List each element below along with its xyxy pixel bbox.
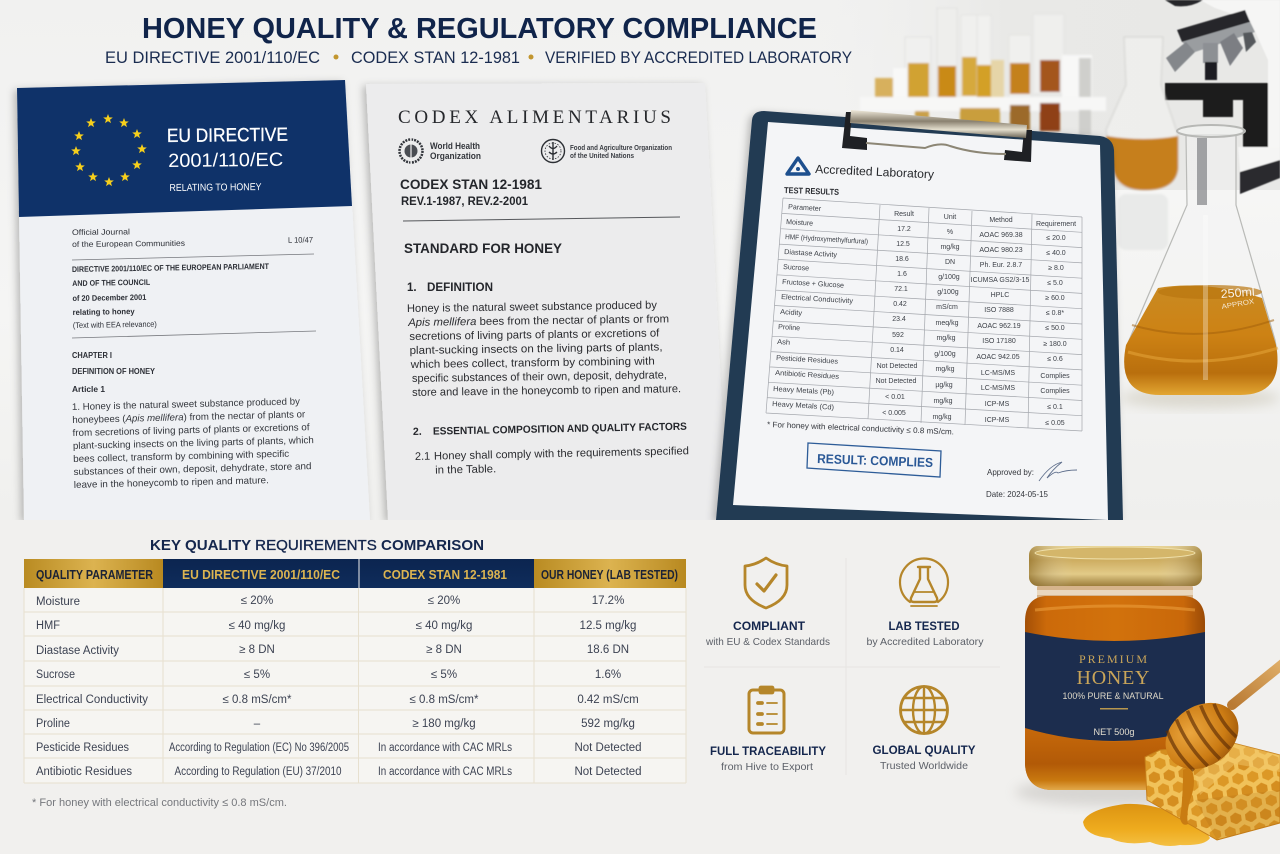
FAO name: [570, 145, 672, 160]
badge: lab tested: LAB TESTED: [888, 619, 960, 633]
definition paragraph: Apis mellifera bees from the nectar of plants or from: [407, 313, 669, 329]
table rows: According to Regulation (EC) No 396/2005: [169, 742, 349, 754]
table rows: ≤ 0.8 mS/cm*: [410, 694, 479, 706]
front flask with amber liquid: [1124, 125, 1278, 395]
test results table: Complies: [1040, 373, 1070, 380]
test results table: g/100g: [934, 351, 956, 358]
badge: compliant: [705, 558, 830, 648]
subtitle: [105, 48, 852, 67]
test results table: µg/kg: [935, 382, 953, 389]
composition text: 2.1: [415, 451, 430, 463]
front flask shadow: [1120, 388, 1280, 408]
FAO name: of the United Nations: [570, 153, 634, 160]
honey puddle: [1083, 804, 1210, 846]
definition paragraph: secretions of living parts of plants or excretions of: [409, 327, 660, 343]
approval block: Approved by:: [987, 467, 1034, 477]
test results table: %: [947, 229, 953, 236]
report sheet: [733, 122, 1108, 520]
test results table: ≤ 50.0: [1045, 325, 1065, 332]
test results table: mg/kg: [935, 366, 955, 373]
composition heading: 2.: [413, 426, 422, 438]
definition paragraph: which bees collect, transform by combining with: [410, 356, 655, 371]
journal header: [72, 225, 314, 249]
jar glass neck: [1037, 584, 1193, 602]
definition paragraph: store and leave in the honeycomb to ripen and mature.: [412, 383, 681, 399]
table rows: Antibiotic Residues: [36, 766, 132, 778]
title: HONEY QUALITY & REGULATORY COMPLIANCE: [142, 13, 817, 45]
WHO name: [430, 141, 481, 162]
definition paragraph: plant-sucking insects on the living parts of plants,: [409, 341, 663, 357]
test results table: Acidity: [780, 307, 803, 317]
test results table: ≤ 0.05: [1045, 420, 1065, 427]
table rows: Pesticide Residues: [36, 742, 129, 754]
chapter headings: DEFINITION OF HONEY: [72, 367, 156, 376]
blue cover band: [17, 80, 352, 217]
table rows: Sucrose: [36, 669, 75, 681]
test results table: Complies: [1040, 388, 1070, 395]
badge: compliant: with EU & Codex Standards: [705, 637, 830, 648]
table rows: ≤ 40 mg/kg: [229, 620, 285, 632]
test results table: AOAC 969.38: [979, 232, 1023, 239]
table header: [24, 559, 686, 588]
approval block: Date: 2024-05-15: [986, 489, 1048, 499]
chapter headings: Article 1: [72, 385, 106, 394]
standard heading: STANDARD FOR HONEY: [404, 240, 563, 256]
test results table: mS/cm: [936, 304, 958, 311]
jar lid: [1029, 546, 1202, 586]
definition heading: 1.: [407, 282, 417, 294]
standard reference: CODEX STAN 12-1981: [400, 176, 542, 192]
definition paragraph: [72, 396, 315, 491]
badge: global quality: [872, 686, 976, 772]
test results table: 0.42: [893, 301, 907, 308]
test results table: Requirement: [1036, 221, 1076, 228]
standard reference: REV.1-1987, REV.2-2001: [401, 194, 528, 208]
lab name: Accredited Laboratory: [815, 162, 934, 181]
test results table: 592: [892, 332, 904, 339]
definition paragraph: substances of their own, deposit, dehydrate, store and: [73, 461, 312, 478]
table rows: Proline: [36, 718, 70, 730]
table rows: [36, 595, 642, 778]
test results table: Ph. Eur. 2.8.7: [980, 262, 1022, 269]
test results table: 12.5: [896, 241, 910, 248]
table rows: ≤ 5%: [431, 669, 457, 681]
jar label text: [1062, 652, 1164, 738]
jar honey body: [1025, 596, 1205, 790]
directive title: DIRECTIVE 2001/110/EC OF THE EUROPEAN PARLIAMENT: [72, 262, 269, 274]
lab scene: test tubes in rack: [860, 8, 1106, 135]
journal header: of the European Communities: [72, 239, 185, 249]
test results table: AOAC 980.23: [979, 247, 1023, 254]
test results table: 1.6: [897, 271, 907, 278]
test results table: mg/kg: [933, 398, 953, 405]
jar label text: PREMIUM: [1079, 652, 1147, 666]
report footnote: * For honey with electrical conductivity ≤ 0.8 mS/cm.: [767, 420, 954, 437]
table rows: Diastase Activity: [36, 645, 119, 657]
FAO name: Food and Agriculture Organization: [570, 145, 672, 152]
table footnote: * For honey with electrical conductivity ≤ 0.8 mS/cm.: [32, 797, 287, 809]
table header: CODEX STAN 12-1981: [383, 568, 507, 582]
icon: lab logo: [787, 158, 809, 174]
definition paragraph: from secretions of living parts of plants or excretions of: [72, 422, 310, 439]
table rows: ≤ 0.8 mS/cm*: [223, 694, 292, 706]
subtitle: VERIFIED BY ACCREDITED LABORATORY: [545, 48, 852, 67]
composition text: [415, 445, 689, 477]
test results heading: TEST RESULTS: [784, 185, 840, 197]
directive title: of 20 December 2001: [72, 293, 147, 303]
test results table: Parameter: [788, 202, 822, 213]
test results table: ≥ 60.0: [1045, 295, 1065, 302]
badge: compliant: COMPLIANT: [733, 619, 806, 633]
icon: globe: [900, 686, 948, 734]
chapter headings: CHAPTER I: [72, 351, 112, 360]
approval block: [986, 462, 1077, 499]
icon: FAO emblem: [542, 140, 564, 162]
table rows: 17.2%: [592, 595, 624, 607]
test results table: ≤ 40.0: [1046, 250, 1066, 257]
table rows: Not Detected: [574, 766, 642, 778]
table rows: Not Detected: [574, 742, 642, 754]
table rows: ≥ 8 DN: [239, 644, 275, 656]
result stamp: RESULT: COMPLIES: [817, 451, 934, 470]
cover heading: EU DIRECTIVE: [167, 125, 288, 147]
test results table: Heavy Metals (Pb): [773, 384, 834, 397]
test results table: ISO 17180: [982, 338, 1016, 345]
badge: global quality: GLOBAL QUALITY: [872, 743, 976, 757]
test results table: mg/kg: [932, 414, 952, 421]
honey dipper: [1153, 662, 1280, 825]
test results table: 18.6: [895, 256, 909, 263]
composition text: Honey shall comply with the requirements specified: [434, 445, 689, 463]
test results table: < 0.005: [882, 410, 906, 417]
table rows: 592 mg/kg: [581, 718, 635, 730]
lab scene: microscope: [1165, 0, 1280, 194]
test results table: Ash: [777, 337, 790, 347]
jar shadow: [1015, 778, 1205, 806]
test results table: g/100g: [937, 289, 959, 296]
journal header: Official Journal: [72, 227, 130, 237]
panel: Codex document: [366, 83, 728, 520]
comparison table: [24, 559, 686, 783]
test results table: mg/kg: [936, 335, 956, 342]
test results table: Unit: [944, 214, 956, 221]
test results table: ≥ 180.0: [1043, 341, 1067, 348]
badge: full traceability: FULL TRACEABILITY: [710, 744, 826, 758]
test results table: Not Detected: [877, 363, 918, 370]
test results table: g/100g: [938, 274, 960, 281]
standard reference: [400, 176, 542, 208]
cover heading: RELATING TO HONEY: [169, 182, 262, 194]
test results table: Proline: [778, 322, 800, 332]
table rows: Moisture: [36, 596, 80, 608]
test results table: AOAC 962.19: [977, 323, 1021, 330]
definition paragraph: [407, 299, 681, 399]
test results table: mg/kg: [940, 244, 960, 251]
table rows: –: [254, 718, 261, 730]
test results table: ≤ 20.0: [1046, 235, 1066, 242]
test results table: 0.14: [890, 347, 904, 354]
table rows: ≤ 5%: [244, 669, 270, 681]
definition paragraph: honeybees (Apis mellifera) from the nectar of plants or: [72, 409, 306, 426]
test results table: ICP-MS: [985, 417, 1010, 424]
test results table: ≤ 0.1: [1047, 404, 1063, 411]
definition paragraph: bees collect, transform by combining with specific: [73, 449, 289, 465]
directive title: relating to honey: [73, 307, 135, 317]
jar label: [1025, 632, 1205, 741]
test results table: Diastase Activity: [784, 247, 838, 259]
front flask with amber liquid: 250ml: [1220, 285, 1255, 301]
test results table: LC-MS/MS: [981, 385, 1015, 392]
table rows: HMF: [36, 620, 60, 632]
test results table: 72.1: [894, 286, 908, 293]
table rows: In accordance with CAC MRLs: [378, 742, 512, 754]
subtitle: CODEX STAN 12-1981: [351, 48, 520, 67]
test results table: ≥ 8.0: [1048, 265, 1064, 272]
front flask with amber liquid: APPROX: [1221, 298, 1255, 311]
honeycomb: [1145, 743, 1280, 840]
test results table: ICP-MS: [985, 401, 1010, 408]
comparison section title: KEY QUALITY REQUIREMENTS COMPARISON: [150, 537, 484, 554]
table rows: 12.5 mg/kg: [580, 620, 636, 632]
jar label text: HONEY: [1076, 667, 1150, 689]
test results table: < 0.01: [885, 394, 905, 401]
definition paragraph: 1. Honey is the natural sweet substance produced by: [72, 396, 300, 413]
badge: full traceability: from Hive to Export: [721, 762, 813, 773]
WHO name: World Health: [430, 141, 480, 152]
table header: OUR HONEY (LAB TESTED): [541, 568, 678, 582]
badge: lab tested: by Accredited Laboratory: [866, 637, 984, 648]
icon: WHO emblem: [400, 138, 422, 164]
test results table: Fructose + Glucose: [782, 277, 844, 290]
test results table: HPLC: [991, 292, 1009, 299]
badge: global quality: Trusted Worldwide: [880, 761, 968, 772]
journal header: L 10/47: [288, 235, 314, 245]
test results table: Not Detected: [876, 378, 917, 385]
test results table: Moisture: [786, 217, 813, 228]
directive title: AND OF THE COUNCIL: [72, 278, 150, 288]
test results table: Antibiotic Residues: [775, 368, 840, 381]
table rows: ≥ 180 mg/kg: [412, 718, 476, 730]
table rows: ≤ 40 mg/kg: [416, 620, 472, 632]
test results table: Pesticide Residues: [776, 353, 839, 366]
test results table: ≤ 5.0: [1047, 280, 1063, 287]
table rows: In accordance with CAC MRLs: [378, 766, 512, 778]
codex heading: CODEX ALIMENTARIUS: [398, 107, 671, 128]
lab scene: rear flask: [1106, 37, 1178, 250]
table rows: According to Regulation (EU) 37/2010: [174, 766, 342, 778]
test results table: AOAC 942.05: [976, 354, 1020, 361]
icon: flask in circle: [900, 559, 948, 606]
composition heading: ESSENTIAL COMPOSITION AND QUALITY FACTORS: [433, 421, 687, 438]
icon: clipboard clip: [842, 110, 1032, 162]
test results table: 17.2: [897, 226, 911, 233]
directive title: (Text with EEA relevance): [73, 320, 157, 330]
icon: shield: [745, 558, 787, 608]
definition heading: DEFINITION: [427, 282, 493, 294]
table rows: 1.6%: [595, 669, 621, 681]
test results table: Heavy Metals (Cd): [772, 399, 834, 412]
chapter headings: [72, 351, 156, 394]
result stamp: [807, 443, 941, 477]
badge: full traceability: [710, 687, 826, 773]
panel: lower section: [0, 520, 1280, 854]
test results table: Result: [894, 211, 914, 218]
honey jar: [1025, 546, 1205, 790]
badge: lab tested: [866, 559, 984, 648]
test results table: meq/kg: [936, 320, 959, 327]
test results table: LC-MS/MS: [981, 370, 1015, 377]
icon: checklist clipboard: [749, 687, 784, 733]
table header: QUALITY PARAMETER: [36, 568, 153, 582]
table rows: 0.42 mS/cm: [577, 694, 639, 706]
jar label text: NET 500g: [1094, 727, 1134, 738]
cover heading: 2001/110/EC: [168, 150, 283, 172]
jar label text: 100% PURE & NATURAL: [1062, 691, 1164, 702]
definition paragraph: Honey is the natural sweet substance produced by: [407, 300, 658, 315]
test results table: ISO 7888: [984, 307, 1014, 314]
subtitle: EU DIRECTIVE 2001/110/EC: [105, 48, 320, 67]
icon: EU stars: [71, 114, 147, 186]
test results table: HMF (Hydroxymethylfurfural): [785, 232, 868, 246]
test results table: ICUMSA GS2/3-15: [971, 277, 1029, 284]
directive title: [72, 262, 270, 330]
test results table: DN: [945, 259, 955, 266]
test results table: ≤ 0.8*: [1046, 310, 1064, 317]
test results table: Electrical Conductivity: [781, 292, 854, 305]
table header: EU DIRECTIVE 2001/110/EC: [182, 568, 340, 582]
test results table: [766, 198, 1082, 431]
table rows: ≥ 8 DN: [426, 644, 462, 656]
test results table: Method: [989, 217, 1013, 224]
definition paragraph: plant-sucking insects on the living parts of plants, which: [73, 435, 314, 452]
cover heading: [167, 125, 289, 194]
photo backdrop: [0, 0, 1280, 520]
table rows: 18.6 DN: [587, 644, 629, 656]
panel: EU directive document: [17, 80, 370, 520]
test results table: 23.4: [892, 316, 906, 323]
WHO name: Organization: [430, 151, 481, 162]
table rows: ≤ 20%: [428, 595, 460, 607]
table rows: ≤ 20%: [241, 595, 273, 607]
test results table: Sucrose: [783, 262, 809, 273]
definition paragraph: leave in the honeycomb to ripen and mature.: [74, 475, 269, 491]
test results table: ≤ 0.6: [1047, 356, 1063, 363]
composition text: in the Table.: [435, 463, 496, 477]
table rows: Electrical Conductivity: [36, 694, 148, 706]
panel: lab report clipboard: [716, 110, 1123, 520]
definition paragraph: specific substances of their own, deposit, dehydrate,: [412, 369, 667, 385]
